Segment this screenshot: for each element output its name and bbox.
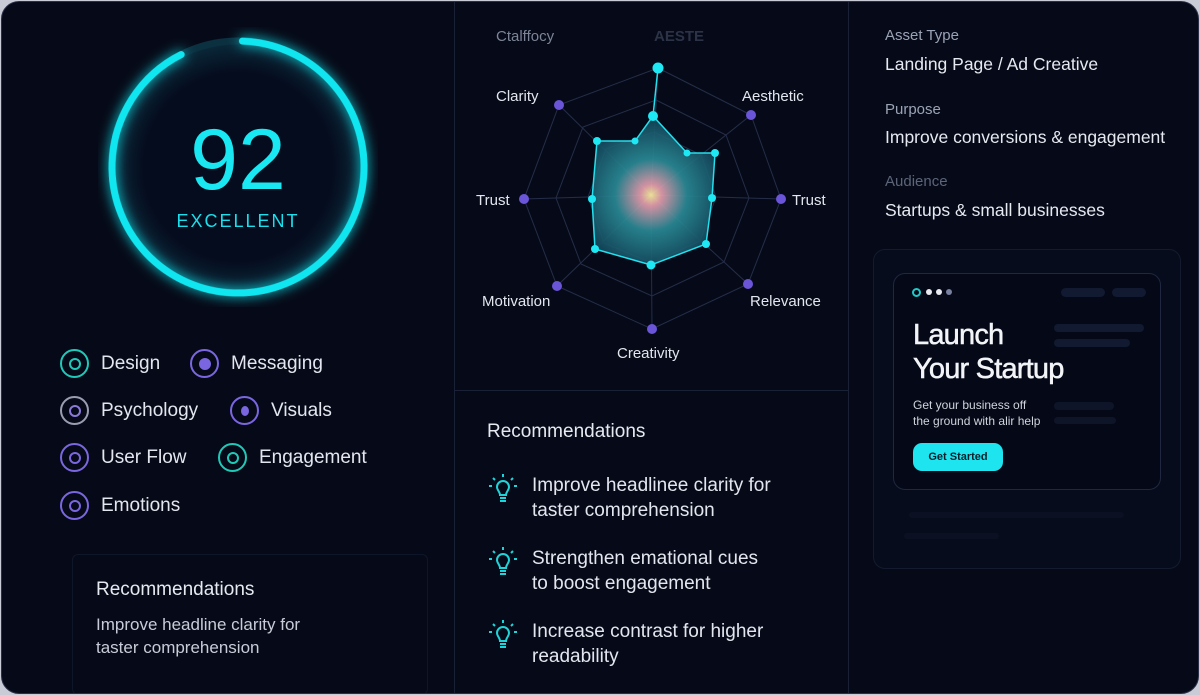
radar chart: AESTE (654, 28, 704, 45)
asset info: Asset Type (885, 27, 959, 44)
radar chart: Creativity (617, 345, 680, 362)
radar chart: Aesthetic (742, 88, 804, 105)
rec item 1: taster comprehension (532, 500, 715, 521)
tag: Engagement (218, 443, 367, 472)
rec item 1 (489, 474, 771, 521)
left recommendation box: Recommendations (96, 579, 254, 600)
radar chart: Trust (476, 192, 510, 209)
tag: Psychology (60, 396, 198, 425)
rec item 2: to boost engagement (532, 573, 711, 594)
tag: User Flow: User Flow (101, 446, 187, 468)
tag: Design (60, 349, 160, 378)
left recommendation box: Improve headline clarity for taster comprehension (96, 615, 300, 657)
asset info: Audience (885, 173, 948, 190)
category tags (60, 349, 367, 520)
score gauge: EXCELLENT (176, 211, 300, 231)
radar chart: Ctalffocy (496, 28, 555, 45)
asset info: Landing Page / Ad Creative (885, 54, 1098, 74)
button (913, 443, 1003, 471)
landing page preview: Your Startup (913, 353, 1064, 385)
rec item 3: Increase contrast for higher (532, 621, 763, 642)
tag: Visuals: Visuals (271, 400, 332, 420)
rec item 1: Improve headlinee clarity for (532, 475, 771, 496)
tag: Psychology: Psychology (101, 400, 198, 420)
tag: Emotions: Emotions (101, 494, 180, 516)
radar chart: Trust (792, 192, 826, 209)
radar chart: Relevance (750, 293, 821, 310)
asset info: Improve conversions & engagement (885, 127, 1165, 147)
recommendations panel: Recommendations (487, 421, 645, 442)
left recommendation box (72, 554, 428, 695)
landing page preview (873, 249, 1181, 569)
rec item 3 (489, 620, 764, 667)
score gauge: 92 (190, 112, 286, 208)
tag: Visuals (230, 396, 332, 425)
data polygon (588, 62, 719, 270)
radar chart: Motivation (482, 293, 550, 310)
tag: Design: Design (101, 352, 160, 374)
landing page preview: Get your business off (913, 398, 1026, 412)
rec item 3: readability (532, 646, 619, 667)
score gauge (98, 28, 378, 306)
radar chart: Clarity (496, 88, 539, 105)
tag: Messaging: Messaging (231, 352, 323, 374)
panel dividers (454, 2, 455, 695)
tag: Engagement: Engagement (259, 446, 367, 468)
asset info: Startups & small businesses (885, 200, 1105, 220)
radar chart (476, 28, 826, 362)
landing page preview: the ground with alir help (913, 414, 1040, 428)
button: Get Started (928, 451, 988, 463)
landing page preview: Launch (913, 319, 1003, 351)
rec item 2 (489, 547, 758, 594)
asset info: Purpose (885, 101, 941, 118)
asset info (885, 27, 1165, 220)
tag: Emotions (60, 491, 180, 520)
tag: Messaging (190, 349, 323, 378)
rec item 2: Strengthen emational cues (532, 548, 758, 569)
tag: User Flow (60, 443, 187, 472)
